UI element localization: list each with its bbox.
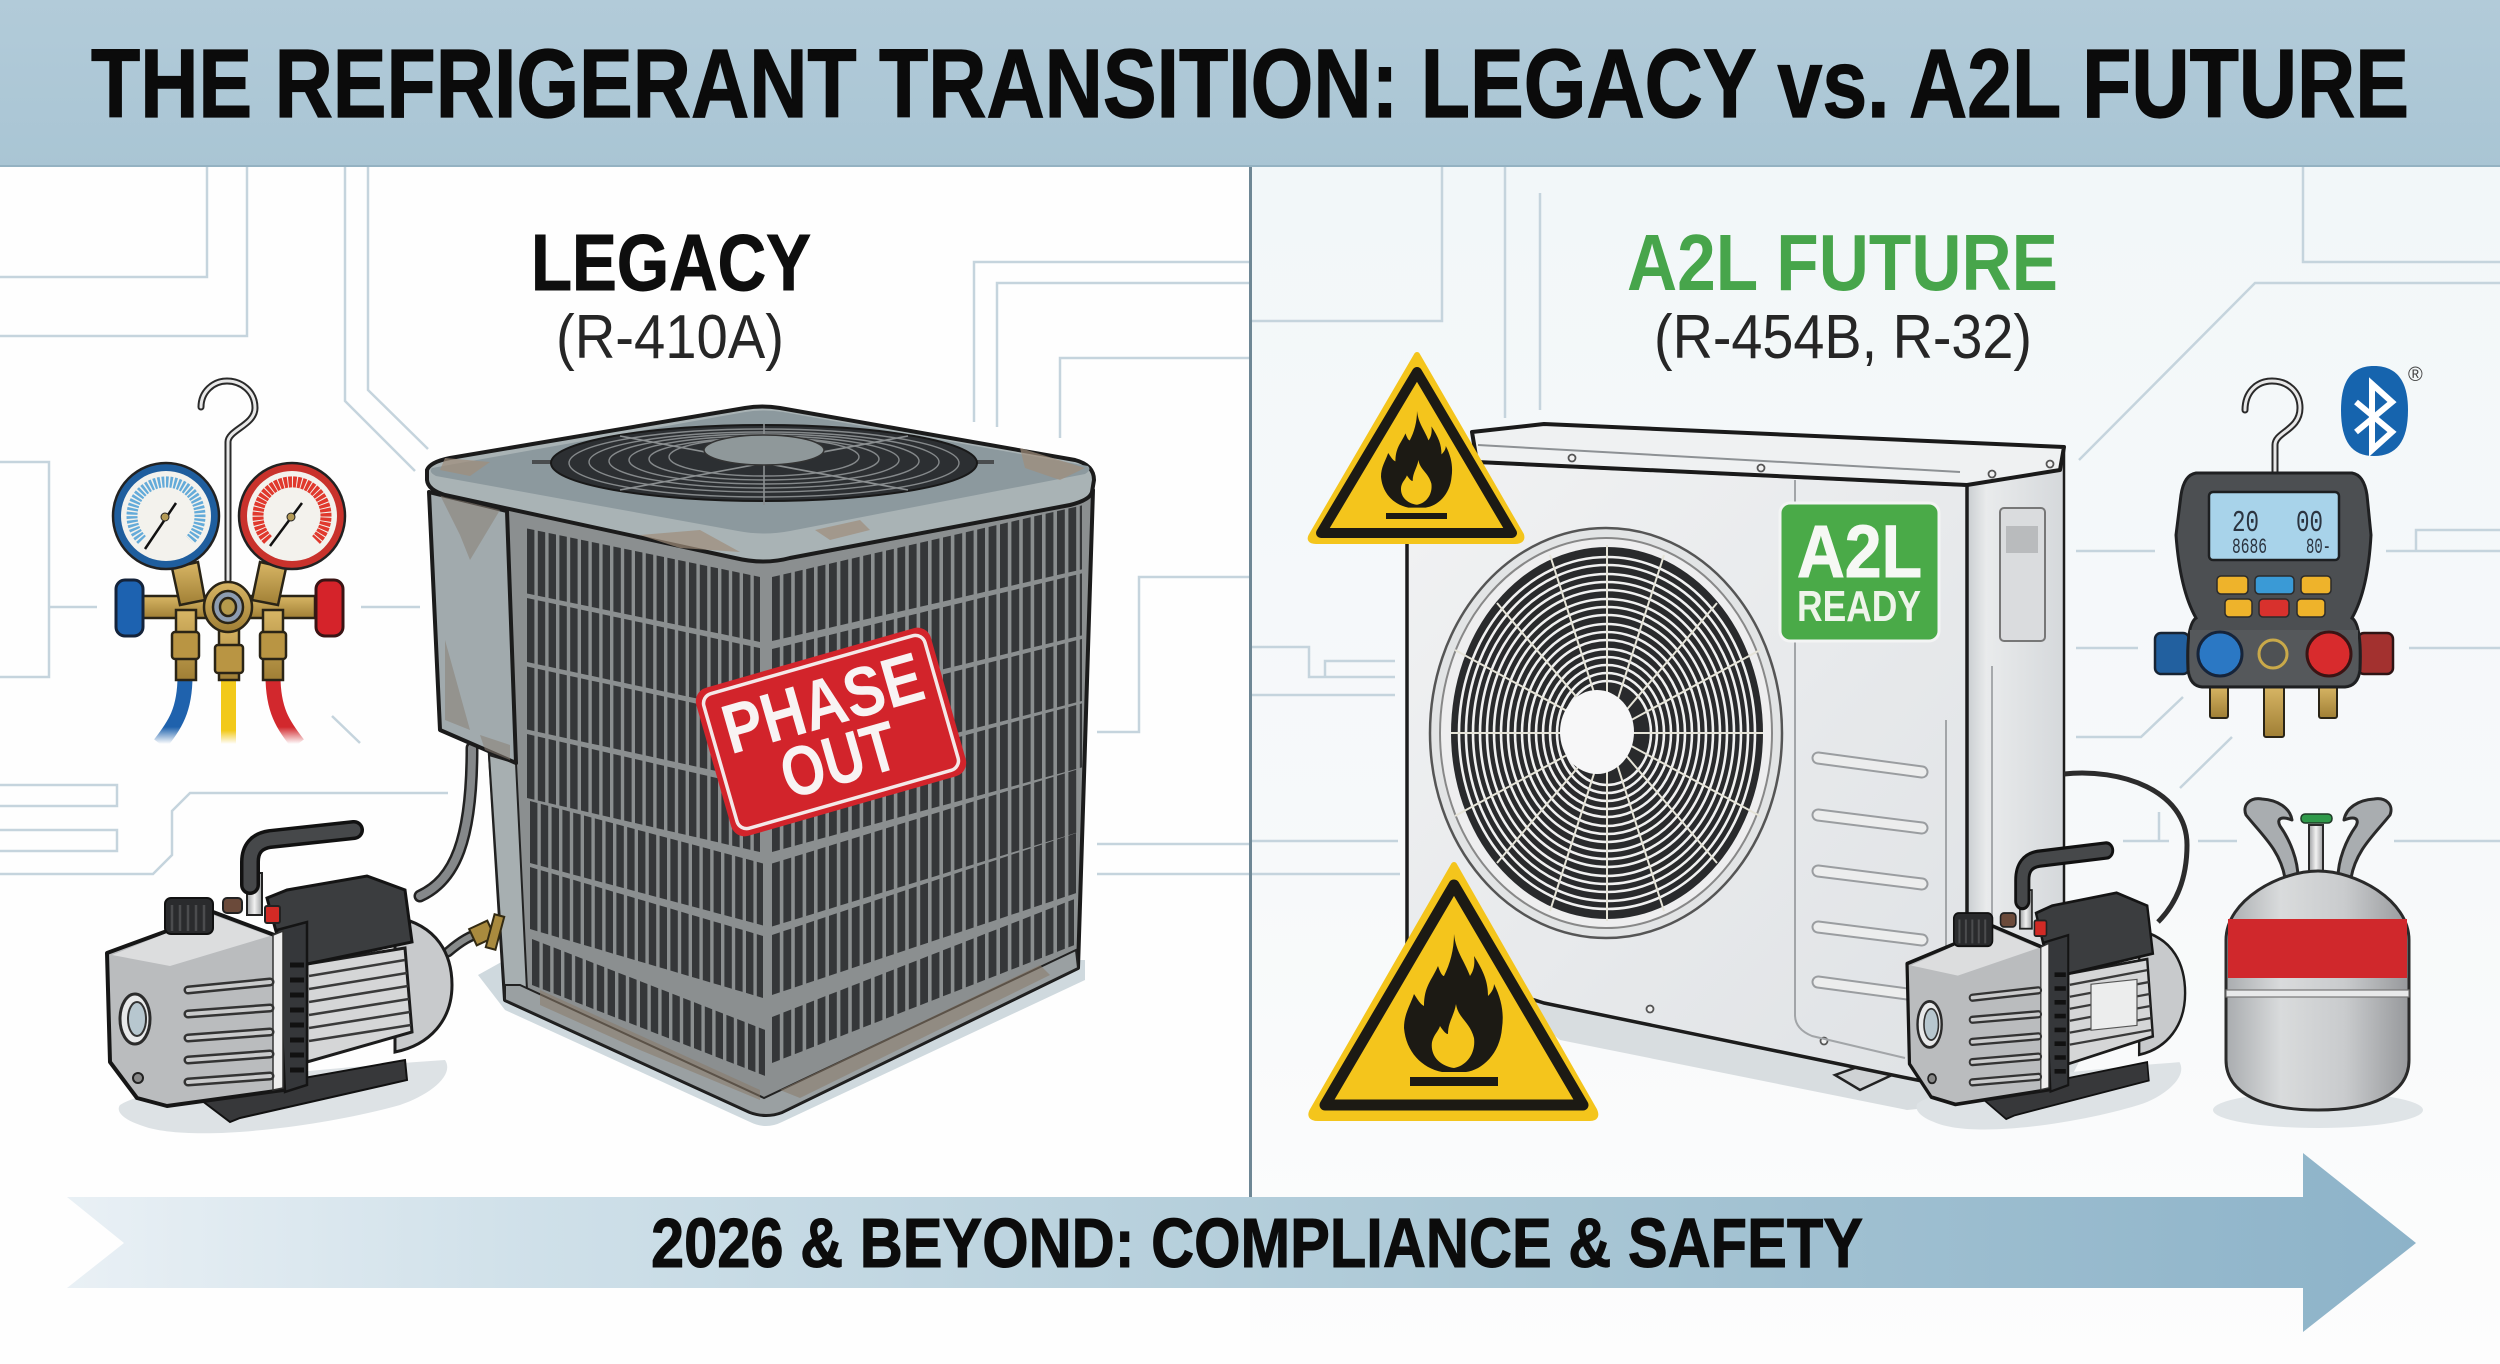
hook: [2245, 381, 2300, 475]
base rim: [505, 950, 1078, 1115]
top cap rim: [427, 406, 1094, 562]
side handle recess: [2000, 508, 2045, 641]
digital manifold gauge: [2155, 381, 2393, 737]
door vents: [1818, 758, 1922, 996]
badge: A2L ready: A2L: [1797, 510, 1922, 593]
gauge: low side blue: [113, 463, 219, 569]
panel: A2L heading: [1627, 218, 2058, 372]
legacy refrigerant name: (R-410A): [556, 303, 784, 372]
shadow: [2213, 1092, 2423, 1128]
brass service valve: [469, 914, 504, 950]
A2L pump hose: [2064, 773, 2187, 922]
lower control panel: [2190, 630, 2358, 685]
fan hub: [704, 435, 824, 465]
legacy hoses to pump: [420, 748, 482, 952]
panel: A2L heading: A2L FUTURE: [1627, 218, 2058, 307]
knobs: [2198, 632, 2242, 676]
control box: [429, 492, 516, 763]
LCD screen: 00: [2296, 506, 2323, 541]
circuit-line background pattern: [0, 167, 2500, 874]
LCD screen: 80-: [2306, 535, 2331, 560]
brass ports: [2210, 686, 2337, 737]
badge: A2L ready: [1780, 503, 1939, 641]
body: [489, 460, 1093, 1115]
side panel: [1967, 447, 2064, 1078]
knob: blue valve: [116, 580, 143, 636]
A2L vacuum pump: [1907, 850, 2185, 1130]
registered mark: ®: [2408, 364, 2423, 386]
LCD screen: 20: [2232, 506, 2259, 541]
mount foot: [1835, 1059, 1907, 1090]
LCD screen: 8686: [2232, 535, 2267, 560]
louvers: left face: [527, 561, 765, 1053]
label: phase out: [693, 624, 969, 840]
gauge: high side red: [239, 463, 345, 569]
hoses: [160, 676, 298, 744]
red band: [2228, 919, 2407, 978]
icon: analog manifold gauge set: [113, 381, 345, 744]
hook: [201, 381, 255, 580]
motor label: [2091, 979, 2137, 1030]
service door: [1795, 480, 1946, 1058]
side valve handles: [2155, 633, 2189, 674]
shadow: [478, 960, 1085, 1126]
tank body: [2226, 871, 2409, 1110]
refrigerant cylinder: [2213, 799, 2423, 1128]
top cap surface: [431, 410, 1089, 534]
icon: large flammable warning triangle: [1311, 865, 1595, 1118]
screws: [1568, 454, 2054, 1044]
handles: [2245, 799, 2391, 878]
panel: legacy heading: LEGACY: [531, 218, 811, 307]
housing: [2176, 473, 2371, 687]
fan guard: [1430, 528, 1782, 938]
valve: [2309, 825, 2323, 872]
rust near base: [540, 965, 1050, 1100]
seam: [2226, 990, 2409, 997]
flame: [1404, 934, 1503, 1072]
rust on cap: [440, 448, 1085, 552]
knob: red valve: [316, 580, 343, 636]
legacy condenser unit: [427, 406, 1094, 1126]
fan grille: [532, 424, 994, 505]
A2L outdoor unit: [1407, 424, 2080, 1110]
louvers: right face: [772, 537, 1082, 1040]
flame: [1381, 411, 1452, 508]
top face: [1472, 424, 2064, 485]
center divider: [1249, 167, 1252, 1197]
label: phase out: OUT: [772, 706, 906, 814]
left corner column: [489, 755, 527, 997]
fan hub: [1560, 690, 1634, 774]
icon: small flammable warning triangle: [1311, 355, 1521, 541]
front face: [1407, 462, 1967, 1090]
timeline arrow: [67, 1153, 2416, 1332]
panel: legacy heading: [531, 218, 811, 372]
A2L refrigerant names: (R-454B, R-32): [1654, 303, 2032, 372]
LCD screen: [2209, 492, 2339, 560]
icon: bluetooth: [2341, 364, 2423, 456]
shadow: [1500, 990, 2080, 1110]
panel: A2L future background: [1250, 167, 2500, 1364]
keypad buttons: [2217, 576, 2331, 617]
legacy vacuum pump: [107, 830, 452, 1133]
header banner: [0, 0, 2500, 167]
badge: A2L ready: READY: [1797, 582, 1921, 631]
label: phase out: PHASE: [713, 637, 932, 769]
arrow caption: 2026 & BEYOND: COMPLIANCE & SAFETY: [651, 1204, 1863, 1282]
brass manifold: [143, 562, 315, 680]
